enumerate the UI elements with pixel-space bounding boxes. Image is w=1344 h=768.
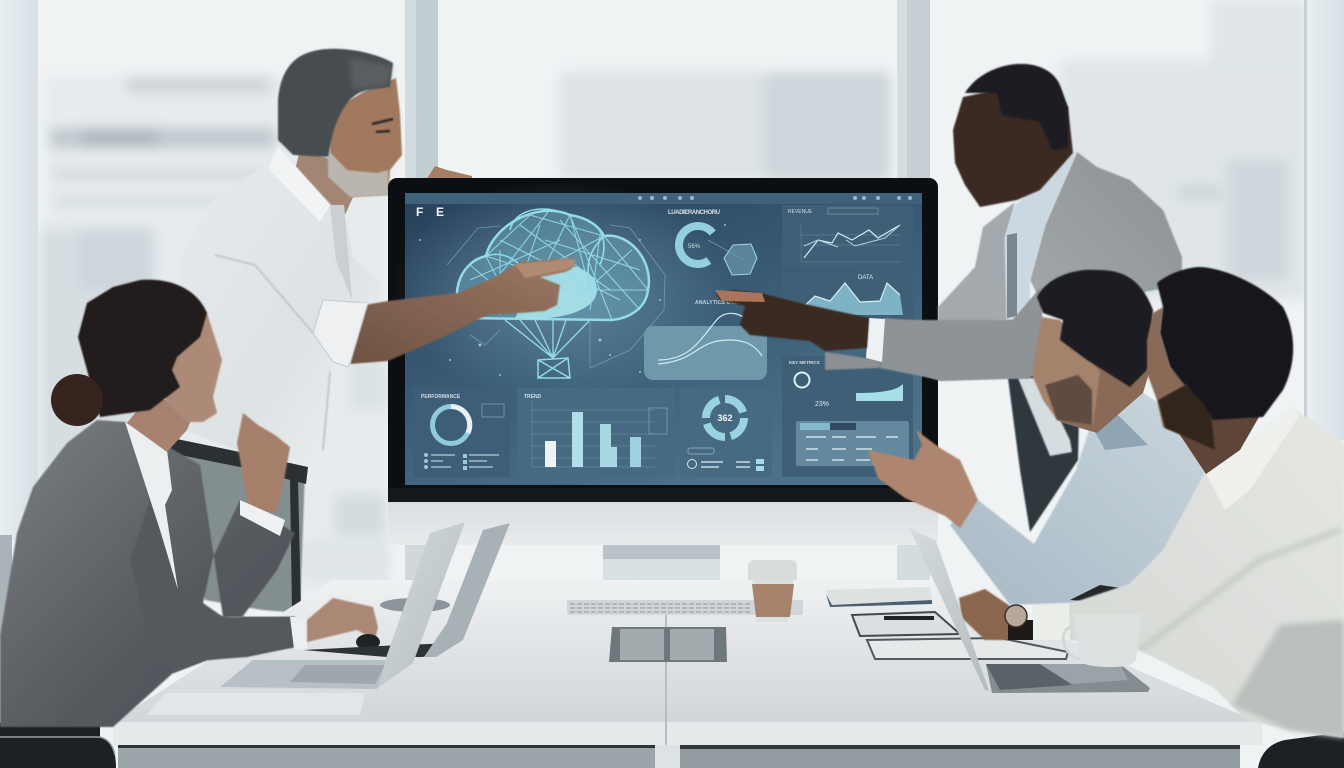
table underside [118, 745, 655, 768]
fingers over monitor top [426, 166, 472, 182]
hair [965, 64, 1068, 150]
hair bun [51, 374, 103, 426]
cloud wireframe [457, 209, 649, 378]
panel: metrics and table: 23% [815, 401, 829, 408]
arm: standing man pointing [340, 258, 575, 364]
laptop: rear left [303, 523, 510, 657]
paper on table [147, 693, 365, 715]
panel: donut summary [414, 388, 510, 477]
laptop: front left [220, 522, 465, 689]
beard [328, 150, 388, 197]
blurred buildings outside [40, 0, 1307, 595]
beard [1045, 375, 1092, 425]
panel: line chart [782, 205, 913, 269]
stand [603, 545, 720, 586]
notebooks [826, 587, 1068, 659]
face [1147, 307, 1205, 440]
lower jacket [1008, 370, 1080, 532]
trousers [163, 445, 305, 613]
donut gauge: top: 56% [688, 244, 701, 250]
shirt [950, 393, 1206, 605]
table [113, 560, 1262, 768]
neck [1060, 360, 1150, 433]
cable vent [609, 627, 727, 662]
hand pointing [716, 290, 869, 351]
rolled sleeve [313, 300, 368, 367]
hair [1157, 267, 1293, 420]
panel: percent donut [680, 388, 772, 477]
shirt [1033, 407, 1344, 738]
basket [538, 358, 570, 378]
hanging shirt [1018, 378, 1072, 456]
panel: percent donut: 362 [717, 413, 733, 423]
collar [1095, 415, 1148, 450]
panel: rounded curve chart [644, 313, 767, 380]
cuff [1033, 604, 1070, 640]
donut gauge: top [672, 219, 724, 271]
jacket lower front [130, 500, 295, 673]
face [165, 313, 222, 422]
head [953, 85, 1073, 207]
dark lower shirt [1232, 620, 1344, 738]
hair [78, 280, 207, 417]
shirt front [1005, 152, 1077, 320]
jacket left side [938, 202, 1015, 325]
bezel [388, 178, 938, 502]
person: standing man in grey jacket [715, 64, 1182, 532]
balloon ropes [505, 320, 590, 358]
mouse [380, 598, 450, 612]
neck [290, 150, 365, 215]
eye and brow [372, 119, 393, 132]
shirt [177, 147, 380, 463]
panel: metrics and table [782, 356, 913, 477]
person: seated man in blue shirt [868, 270, 1206, 605]
panel: screen [390, 180, 922, 485]
jacket sleeve [825, 288, 1044, 381]
lower cuff [290, 617, 307, 650]
cuff [240, 500, 285, 536]
jacket [0, 420, 295, 727]
panel: donut summary: PERFORMANCE [421, 394, 461, 400]
text: middle caption: ANALYTICS OVERVIEW [695, 300, 755, 306]
neck [127, 395, 195, 452]
hair [1037, 270, 1153, 387]
hair [278, 49, 393, 157]
keyboard [567, 600, 803, 615]
panel: area chart: DATA [858, 275, 873, 281]
person: standing man in white shirt [163, 49, 472, 613]
ear [306, 116, 326, 150]
white cuff [866, 318, 885, 362]
panel: bar chart: TREND [524, 394, 542, 400]
belt [165, 437, 308, 484]
raised hand [237, 413, 290, 515]
stars [419, 224, 761, 376]
face [1032, 317, 1100, 425]
person: seated woman [0, 280, 380, 727]
beard [1158, 385, 1215, 450]
white mug [1063, 614, 1141, 667]
hand [959, 589, 1010, 640]
laptop: right [909, 528, 1150, 693]
top bar [405, 193, 922, 204]
network lines [447, 225, 744, 368]
logo: FE [416, 205, 444, 219]
panel: bar chart [517, 388, 674, 477]
face [328, 78, 402, 197]
chin [388, 495, 938, 545]
open hand [868, 430, 978, 528]
blouse [125, 422, 178, 590]
hand on mouse [307, 598, 378, 642]
panel: metrics and table: KEY METRICS [789, 360, 820, 365]
chair backs [0, 535, 1344, 768]
table front edge [113, 722, 1262, 745]
heading: top centre: LUADIERANCHORU [668, 210, 720, 216]
jacket right side [1030, 152, 1182, 300]
panel: area chart [782, 272, 913, 320]
icon: hexagon [724, 244, 757, 275]
neck [1170, 410, 1263, 474]
coffee cup [748, 560, 797, 622]
window pillars and mullions [0, 0, 38, 540]
panel: line chart: REVENUE [788, 209, 813, 215]
person: seated man in white shirt [959, 267, 1344, 738]
watch [1005, 605, 1033, 640]
